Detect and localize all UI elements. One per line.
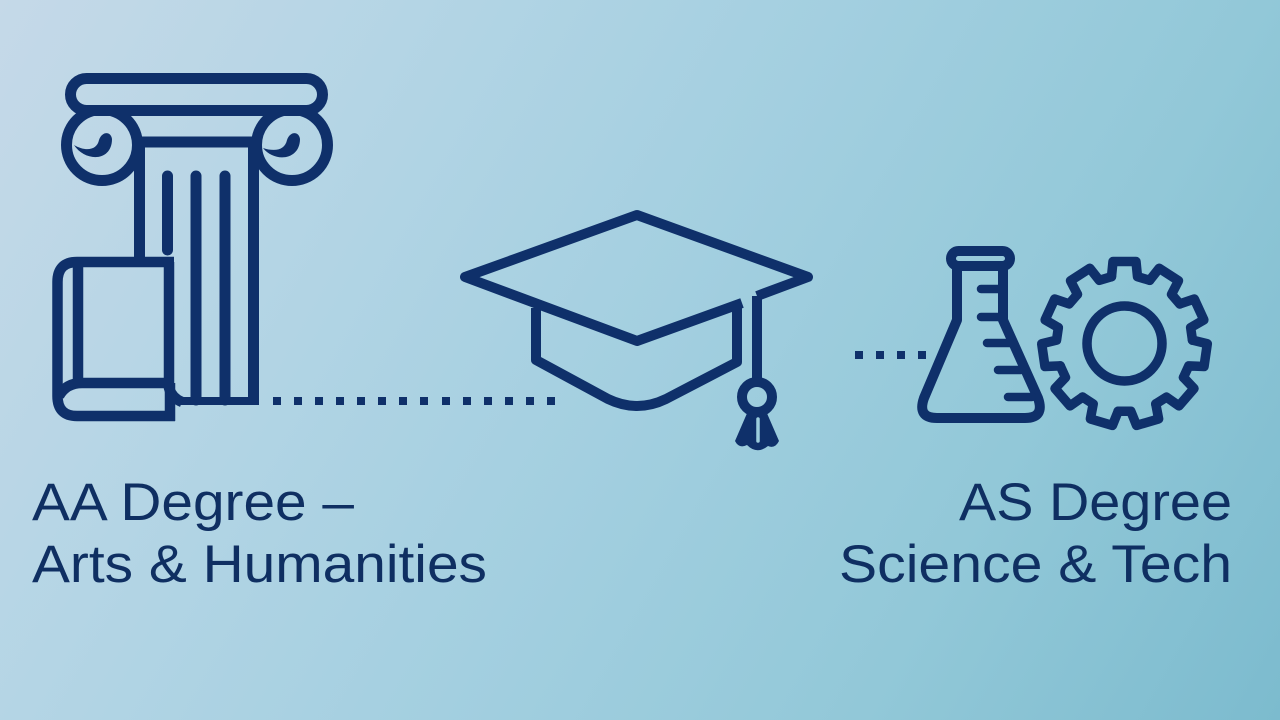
icon: graduation cap xyxy=(465,215,808,450)
column shaft xyxy=(140,142,254,405)
text block: AS degree label xyxy=(839,473,1232,594)
gear hub xyxy=(1087,306,1162,381)
icon: gear xyxy=(1040,261,1210,429)
text block: AA degree label xyxy=(32,473,487,594)
cap body xyxy=(536,303,737,406)
flask lip xyxy=(951,251,1010,266)
book xyxy=(58,262,182,421)
tassel xyxy=(735,411,779,450)
right volute xyxy=(256,110,328,180)
dotted connector: left xyxy=(273,397,555,405)
tassel ring xyxy=(742,382,772,412)
dotted connector: right xyxy=(855,351,926,359)
text block: AS degree label: AS Degree xyxy=(959,473,1232,532)
tassel cord xyxy=(752,296,762,380)
left volute xyxy=(66,110,138,180)
column base line xyxy=(178,397,258,405)
column capital xyxy=(70,78,322,110)
icon: flask xyxy=(922,251,1040,418)
gear teeth xyxy=(1040,261,1210,429)
flask ticks xyxy=(981,289,1032,397)
text block: AA degree label: Arts & Humanities xyxy=(32,535,487,594)
text block: AS degree label: Science & Tech xyxy=(839,535,1232,594)
mortarboard xyxy=(465,215,808,341)
text block: AA degree label: AA Degree – xyxy=(32,473,355,532)
column flutes xyxy=(168,176,225,400)
flask body xyxy=(922,266,1040,418)
icon: ionic column with book xyxy=(58,78,328,421)
tassel slit xyxy=(756,419,760,441)
